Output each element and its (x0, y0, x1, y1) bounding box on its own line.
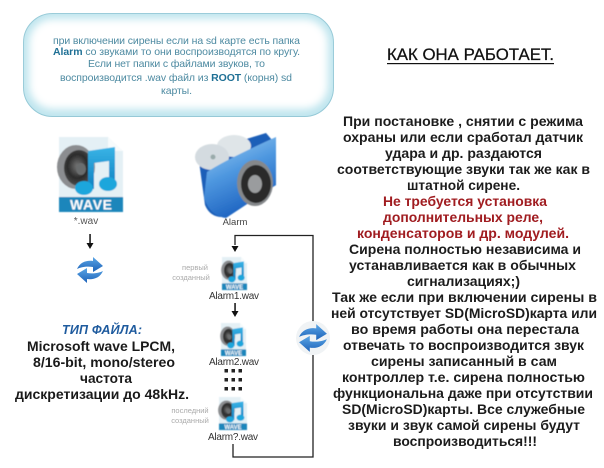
arrow: Alarm1 to Alarm2 (232, 303, 238, 317)
label: Alarm2.wav: Alarm2.wav (209, 357, 259, 368)
text block: description: Так же если при включении сирены в (332, 290, 597, 305)
text block: description: удара и др. раздаются (385, 146, 542, 161)
red highlighted sentence: дополнительных реле, (383, 210, 543, 225)
file type details: частота (80, 370, 132, 386)
text block: description: сирены записанный в сам (371, 354, 557, 369)
icon: wave file (57, 137, 123, 212)
icon: last alarm file (218, 397, 247, 431)
text block: description: устанавливается как в обычных (349, 258, 576, 273)
icon: Alarm2 file: WAVE (225, 351, 242, 357)
text block: description: сигнализациях;) (407, 274, 520, 289)
text block: description: контроллер т.е. сирена полностью (342, 370, 585, 385)
caption: last created: последний (171, 406, 209, 415)
label: Alarm?.wav: Alarm?.wav (208, 432, 258, 443)
file type details (15, 338, 189, 402)
label: Alarm: Alarm (223, 217, 247, 228)
red highlighted sentence: Не требуется установка (383, 194, 547, 209)
file type block (15, 321, 189, 402)
file type details: Microsoft wave LPCM, (27, 338, 175, 354)
text block: description: охраны или если сработал датчик (343, 130, 583, 145)
file type heading: ТИП ФАЙЛА: (62, 321, 142, 337)
label: wav: *.wav (74, 216, 98, 227)
icon: refresh on loop (296, 321, 330, 355)
file type details: дискретизации до 48kHz. (15, 386, 189, 402)
caption: last created: созданный (171, 416, 209, 425)
heading: how it works: КАК ОНА РАБОТАЕТ. (387, 46, 554, 64)
bubble text: Alarm со звуками то они воспроизводятся по кругу. (53, 46, 300, 58)
callout bubble: alarm folder note (24, 14, 334, 116)
bubble text: воспроизводится .wav файл из ROOT (корня) sd (60, 72, 292, 84)
caption: first created (172, 263, 210, 282)
arrow: wav to convert (86, 234, 94, 249)
text block: description: отвечать то воспроизводится звук (343, 338, 584, 353)
caption: last created (171, 406, 209, 425)
bubble text: карты. (161, 85, 192, 97)
label: Alarm1.wav: Alarm1.wav (209, 291, 259, 302)
icon: last alarm file: WAVE (224, 425, 242, 431)
text block: description: во время работы она перестала (351, 322, 579, 337)
file type details: 8/16-bit, mono/stereo (33, 354, 175, 370)
caption: first created: созданный (172, 273, 210, 282)
icon: Alarm2 file (220, 323, 246, 357)
loop line (233, 236, 313, 457)
caption: first created: первый (182, 263, 208, 272)
icon: refresh (77, 257, 103, 283)
bubble text: Если нет папки с файлами звуков, то (88, 58, 265, 70)
text block: description: При постановке , снятии с режима (343, 114, 583, 129)
bubble text: при включении сирены если на sd карте есть папка (53, 35, 300, 47)
text block: description: звуки и звук самой сирены будут (348, 418, 580, 433)
red highlighted sentence (357, 194, 569, 241)
icon: folder with speaker (195, 133, 276, 218)
text block: description: ней отсутствует SD(MicroSD)карта или (331, 306, 597, 321)
text block: description (331, 114, 597, 449)
text block: description: Сирена полностью независима и (349, 242, 581, 257)
icon: Alarm1 file: WAVE (226, 285, 243, 291)
icon: wave file: WAVE (70, 196, 112, 212)
icon: Alarm1 file (221, 257, 247, 291)
text block: description: функциональна даже при отсутствии (333, 386, 593, 401)
bubble text (53, 35, 300, 97)
text block: description: SD(MicroSD)карты. Все служебные (342, 402, 585, 417)
arrow: loop into Alarm1 (232, 246, 238, 252)
text block: description: штатной сирене. (407, 178, 520, 193)
red highlighted sentence: конденсаторов и др. модулей. (357, 226, 569, 241)
text block: description: соответствующие звуки так же как в (337, 162, 590, 177)
dots: more files (224, 369, 242, 390)
text block: description: воспроизводиться!!! (393, 434, 537, 449)
